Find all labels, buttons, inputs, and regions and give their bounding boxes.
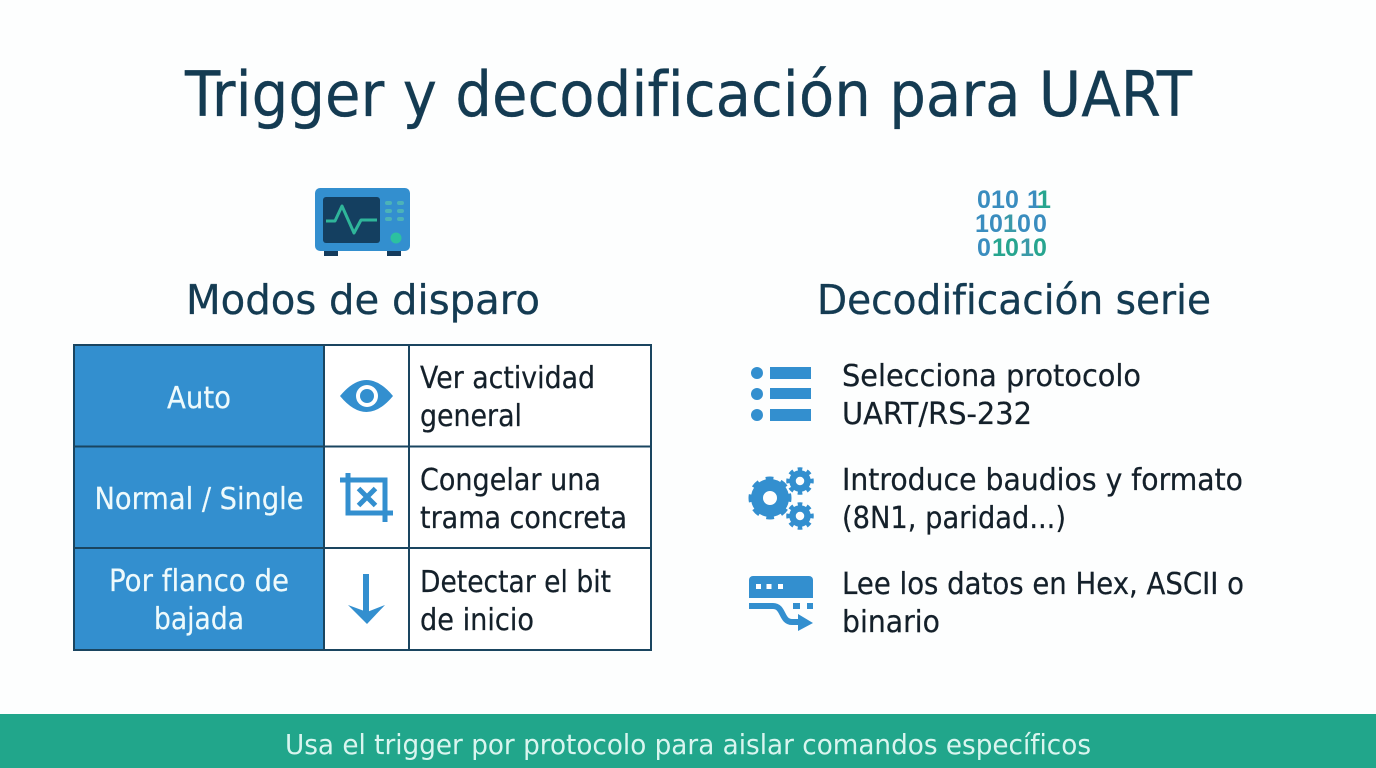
icon: eye — [340, 380, 393, 412]
text: lee los datos — [842, 567, 1244, 640]
row text: Congelar una trama concreta: trama concreta — [420, 501, 627, 536]
footer text: Usa el trigger por protocolo para aislar comandos específicos — [285, 728, 1091, 761]
icon: down arrow — [348, 574, 385, 624]
row label: Por flanco de bajada: Por flanco de — [109, 564, 289, 599]
row text: Congelar una trama concreta — [420, 463, 627, 536]
icon: data bus — [749, 576, 813, 631]
text: selecciona protocolo: Selecciona protocolo — [842, 359, 1141, 394]
row label: Por flanco de bajada: bajada — [154, 602, 244, 637]
text: selecciona protocolo: UART/RS-232 — [842, 397, 1032, 432]
icon: binary digits: 1 — [1037, 186, 1051, 214]
text: introduce baudios: (8N1, paridad...) — [842, 501, 1066, 536]
icon: oscilloscope — [315, 188, 410, 256]
text: selecciona protocolo — [842, 359, 1141, 432]
icon: crop frame — [340, 473, 393, 522]
text: lee los datos: Lee los datos en Hex, ASCII o — [842, 567, 1244, 602]
text: introduce baudios — [842, 463, 1243, 536]
row label: Por flanco de bajada — [109, 564, 289, 637]
icon: binary digits: 10 — [975, 210, 1003, 238]
panel: decodificación serie — [749, 186, 1244, 640]
table: trigger modes — [74, 345, 651, 650]
title: Trigger y decodificación para UART — [184, 58, 1193, 131]
row label: Auto: Auto — [167, 381, 231, 416]
text: introduce baudios: Introduce baudios y formato — [842, 463, 1243, 498]
row text: Congelar una trama concreta: Congelar una — [420, 463, 601, 498]
icon: binary digits — [975, 186, 1051, 262]
icon: binary digits: 10 — [992, 234, 1019, 262]
heading: modos de disparo: Modos de disparo — [186, 276, 540, 324]
icon: binary digits: 1 — [1003, 210, 1017, 238]
heading: decodificación serie: Decodificación serie — [817, 276, 1211, 324]
footer banner — [0, 714, 1376, 768]
row text: Ver actividad general: general — [420, 399, 522, 434]
row text: Detectar el bit de inicio — [420, 565, 611, 638]
row text: Detectar el bit de inicio: Detectar el bit — [420, 565, 611, 600]
row text: Detectar el bit de inicio: de inicio — [420, 603, 534, 638]
icon: binary digits: 00 — [1017, 210, 1047, 238]
row text: Ver actividad general — [420, 361, 595, 434]
row text: Ver actividad general: Ver actividad — [420, 361, 595, 396]
icon: binary digits: 0 — [1033, 234, 1047, 262]
icon: binary digits: 0 — [977, 234, 991, 262]
panel: modos de disparo — [74, 188, 651, 650]
icon: binary digits: 0101 — [977, 186, 1041, 214]
icon: gears — [750, 469, 812, 528]
icon: binary digits: 1 — [1020, 234, 1034, 262]
row label: Normal / Single: Normal / Single — [94, 482, 304, 517]
icon: list — [751, 367, 811, 421]
text: lee los datos: binario — [842, 605, 940, 640]
